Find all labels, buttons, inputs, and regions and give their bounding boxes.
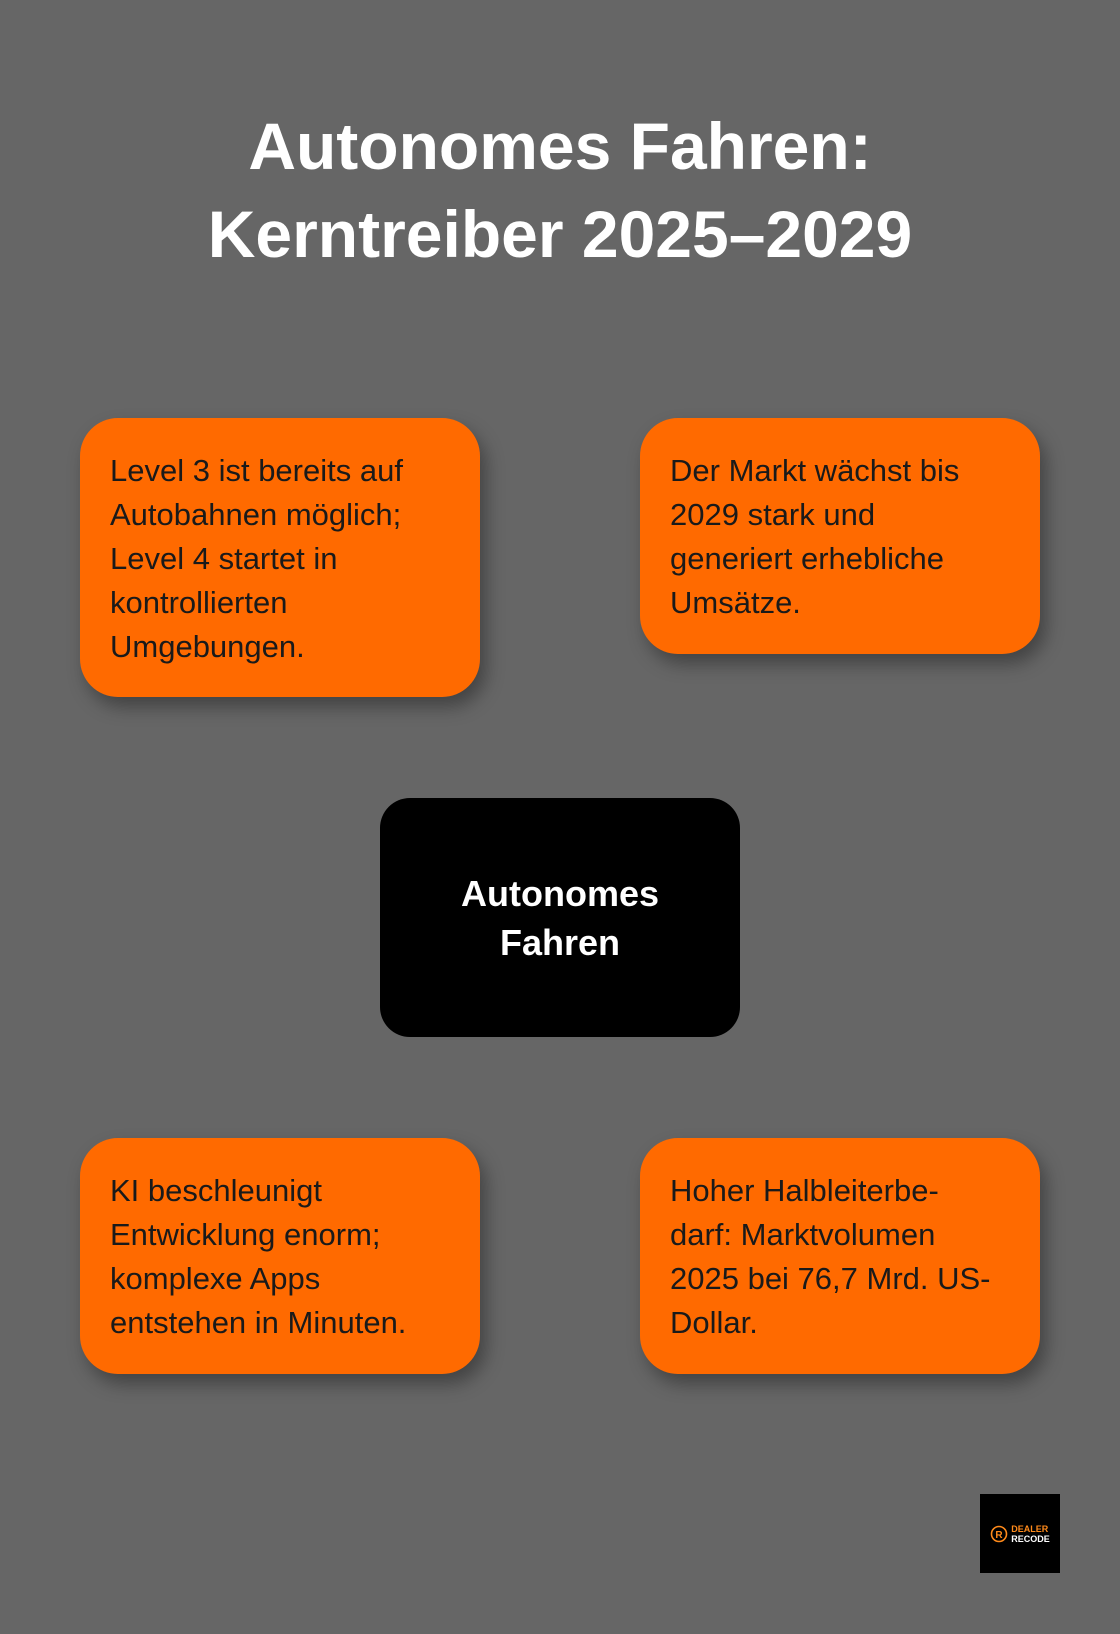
card: market growth — [640, 418, 1040, 654]
card: semiconductors: Dollar. — [670, 1305, 758, 1340]
card: AI: komplexe Apps — [110, 1261, 320, 1296]
card: level 3 / level 4: Level 3 ist bereits auf — [110, 453, 403, 488]
title — [208, 109, 912, 271]
logo: R — [996, 1530, 1004, 1540]
card: market growth: Der Markt wächst bis — [670, 453, 959, 488]
card: semiconductors — [640, 1138, 1040, 1374]
title: Autonomes Fahren: — [248, 109, 872, 183]
card: AI: Entwicklung enorm; — [110, 1217, 381, 1252]
logo — [980, 1494, 1060, 1573]
logo: DEALER — [1011, 1524, 1048, 1534]
card: market growth: 2029 stark und — [670, 497, 875, 532]
card: level 3 / level 4: Umgebungen. — [110, 629, 305, 664]
center node: Fahren — [500, 922, 620, 962]
card: semiconductors: 2025 bei 76,7 Mrd. US- — [670, 1261, 991, 1296]
card: AI: entstehen in Minuten. — [110, 1305, 406, 1340]
center node — [380, 798, 740, 1037]
center node: Autonomes — [461, 872, 659, 914]
card: semiconductors: darf: Marktvolumen — [670, 1217, 935, 1252]
card: level 3 / level 4: Autobahnen möglich; — [110, 497, 401, 532]
title: Kerntreiber 2025–2029 — [208, 197, 912, 271]
card: AI: KI beschleunigt — [110, 1173, 322, 1208]
card: market growth: Umsätze. — [670, 585, 801, 620]
logo: RECODE — [1011, 1534, 1050, 1544]
card: level 3 / level 4 — [80, 418, 480, 697]
card: market growth: generiert erhebliche — [670, 541, 944, 576]
card: semiconductors: Hoher Halbleiterbe- — [670, 1173, 939, 1208]
card: level 3 / level 4: kontrollierten — [110, 585, 287, 620]
card: level 3 / level 4: Level 4 startet in — [110, 541, 337, 576]
card: AI — [80, 1138, 480, 1374]
